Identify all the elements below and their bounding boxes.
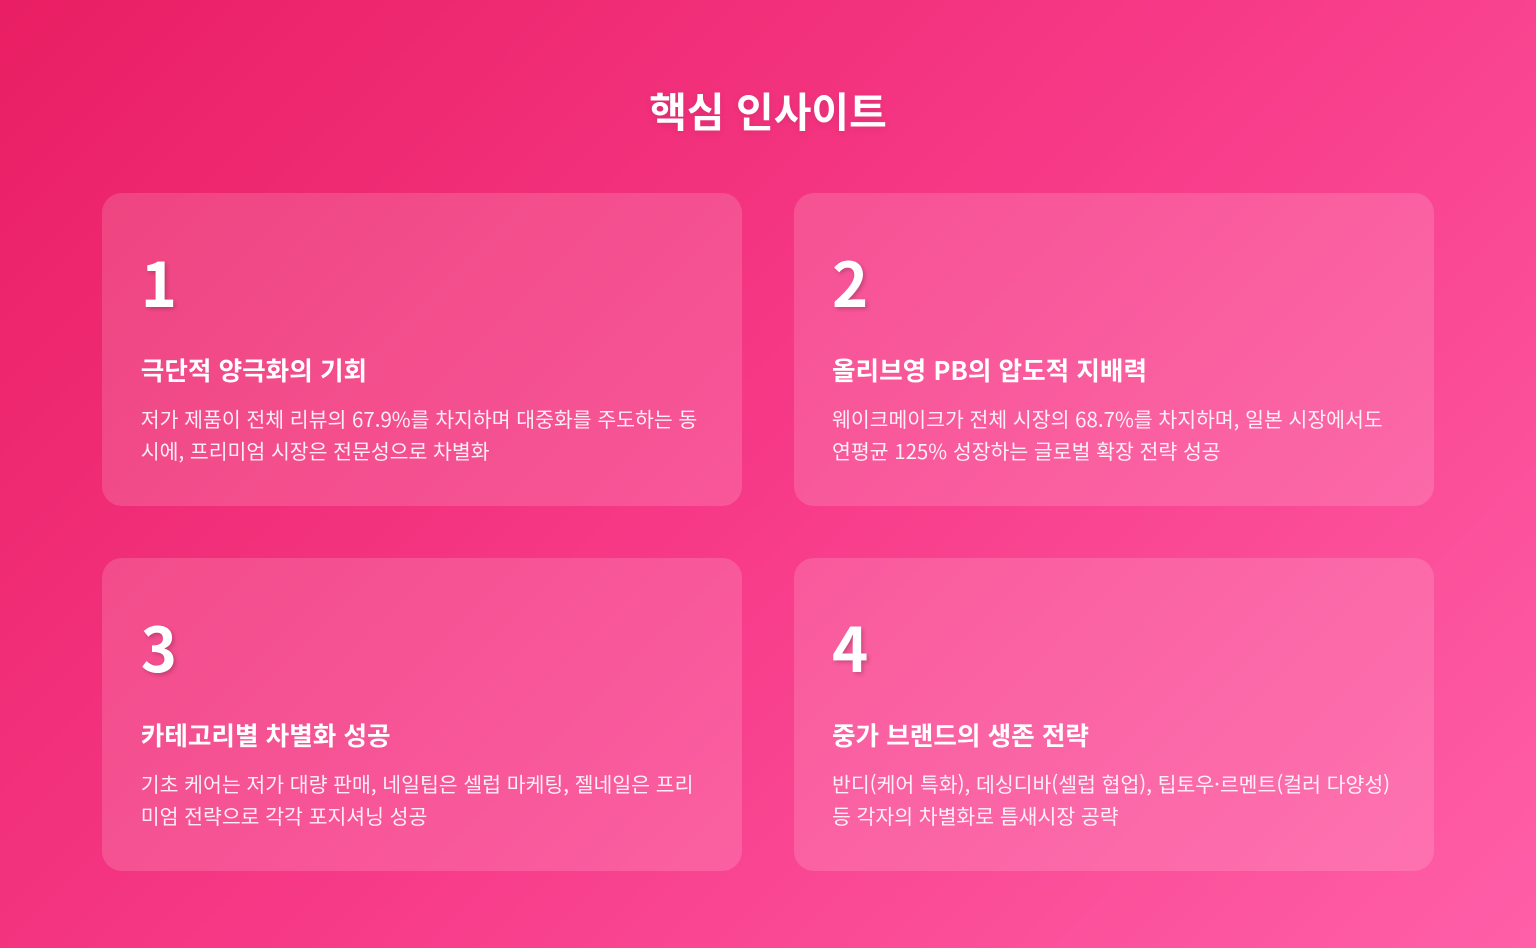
text 4: 반디(케어 특화), 데싱디바(셀럽 협업), 팁토우·르멘트(컬러 다양성) [832,768,1390,798]
text 1: 시에, 프리미엄 시장은 전문성으로 차별화 [141,435,490,465]
number 4: 4 [832,601,868,690]
text 2: 웨이크메이크가 전체 시장의 68.7%를 차지하며, 일본 시장에서도 [832,403,1383,433]
heading 1: 극단적 양극화의 기회 [141,351,367,388]
panel: insight 3 [102,558,742,871]
text 3: 미엄 전략으로 각각 포지셔닝 성공 [141,800,427,830]
heading 2: 올리브영 PB의 압도적 지배력 [832,351,1147,388]
panel: insight 4 [794,558,1434,871]
heading 3: 카테고리별 차별화 성공 [141,716,391,753]
text 4 [832,768,1390,830]
number 3: 3 [141,601,177,690]
panel: insight 2 [794,193,1434,506]
text 1: 저가 제품이 전체 리뷰의 67.9%를 차지하며 대중화를 주도하는 동 [141,403,697,433]
number 1: 1 [141,236,177,325]
text 1 [141,403,697,465]
text 2 [832,403,1383,465]
panel: insight 1 [102,193,742,506]
text 3: 기초 케어는 저가 대량 판매, 네일팁은 셀럽 마케팅, 젤네일은 프리 [141,768,693,798]
text 2: 연평균 125% 성장하는 글로벌 확장 전략 성공 [832,435,1221,465]
number 2: 2 [832,236,868,325]
title: 핵심 인사이트 [649,79,887,139]
text 3 [141,768,693,830]
heading 4: 중가 브랜드의 생존 전략 [832,716,1089,753]
text 4: 등 각자의 차별화로 틈새시장 공략 [832,800,1119,830]
